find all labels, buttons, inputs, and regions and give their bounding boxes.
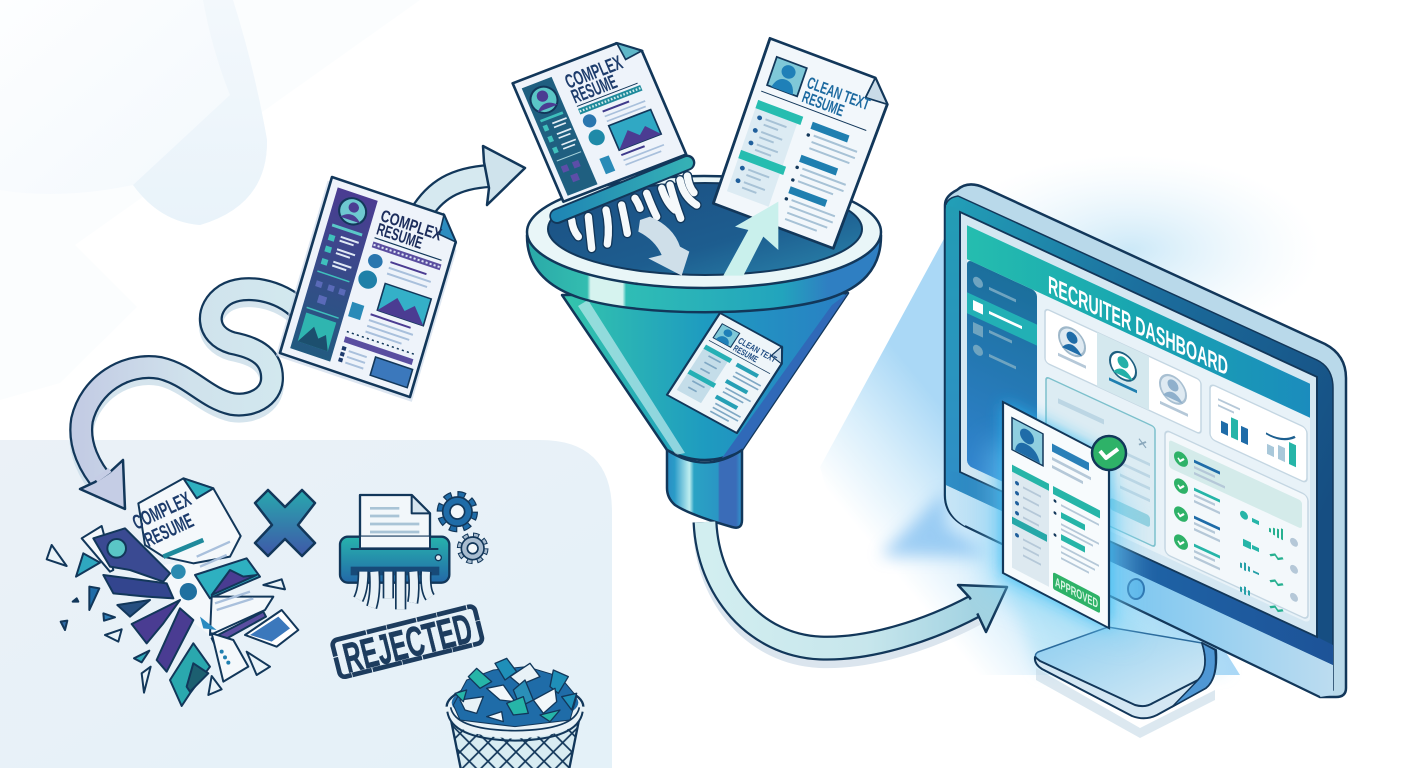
monitor chin	[946, 485, 1333, 697]
monitor stand	[1035, 627, 1216, 738]
rejected stamp	[331, 603, 485, 684]
resume title: CLEAN TEXT	[736, 336, 778, 365]
approved stamp	[1053, 572, 1100, 613]
glow around approved resume	[990, 402, 1130, 640]
shattered complex resume	[82, 478, 298, 706]
complex resume over shredder: RESUME	[568, 71, 620, 108]
header bar	[967, 225, 1310, 418]
shredder blade highlight	[557, 163, 687, 216]
icon: paper shredder	[340, 495, 449, 609]
clean text resume: RESUME	[800, 87, 847, 120]
shattered complex resume: RESUME	[141, 509, 197, 552]
candidate cards	[1045, 308, 1201, 434]
resume title: CLEAN TEXT	[805, 73, 873, 114]
rejected stamp: REJECTED	[339, 605, 477, 682]
icon: teal reject cross	[255, 490, 315, 556]
resume title: COMPLEX	[562, 52, 626, 94]
approved stamp: APPROVED	[1055, 574, 1098, 611]
funnel highlights	[578, 300, 685, 455]
monitor casing	[945, 184, 1346, 697]
resume shards	[47, 545, 285, 695]
clean resume dropping through funnel: RESUME	[731, 344, 760, 365]
shredded strips	[572, 176, 697, 248]
trash bin with shredded paper	[447, 658, 583, 768]
clean resume dropping through funnel	[667, 313, 790, 433]
funnel interior	[548, 183, 862, 275]
funnel rim	[527, 176, 881, 288]
analytics card	[1210, 384, 1307, 483]
power button	[1128, 579, 1144, 599]
funnel cone	[562, 293, 848, 460]
panel: rejected zone	[0, 440, 612, 768]
complex resume document: RESUME	[375, 219, 425, 253]
monitor bezel	[945, 196, 1333, 697]
arrow: down into funnel	[638, 217, 689, 276]
complex resume over shredder	[513, 36, 686, 202]
arrow: up to clean resume	[723, 202, 778, 276]
approved candidates list	[1165, 430, 1308, 625]
icon: small gear	[459, 535, 486, 562]
approved resume	[1003, 402, 1109, 628]
shredder blade bar	[557, 163, 687, 216]
screen	[960, 212, 1317, 637]
funnel spout	[667, 450, 742, 528]
clean text resume	[713, 38, 894, 250]
icon: green approval check	[1092, 436, 1126, 470]
resume title: COMPLEX	[379, 206, 444, 245]
sidebar	[967, 259, 1037, 498]
glow behind monitor	[820, 155, 1320, 675]
funnel	[527, 176, 881, 528]
monitor left bezel	[946, 205, 962, 485]
funnel right shading	[722, 293, 848, 458]
dashboard title: RECRUITER DASHBOARD	[1048, 270, 1228, 382]
monitor	[945, 184, 1346, 697]
arrow: resume to funnel	[420, 146, 525, 215]
shattered resume title: COMPLEX	[129, 488, 195, 535]
icon: large gear	[440, 494, 475, 529]
complex resume document	[276, 176, 465, 402]
arrow: winding path to rejection	[80, 289, 300, 509]
candidate detail card	[1046, 377, 1155, 547]
arrow: spout to approved resume	[705, 522, 1007, 656]
funnel band	[527, 236, 881, 312]
